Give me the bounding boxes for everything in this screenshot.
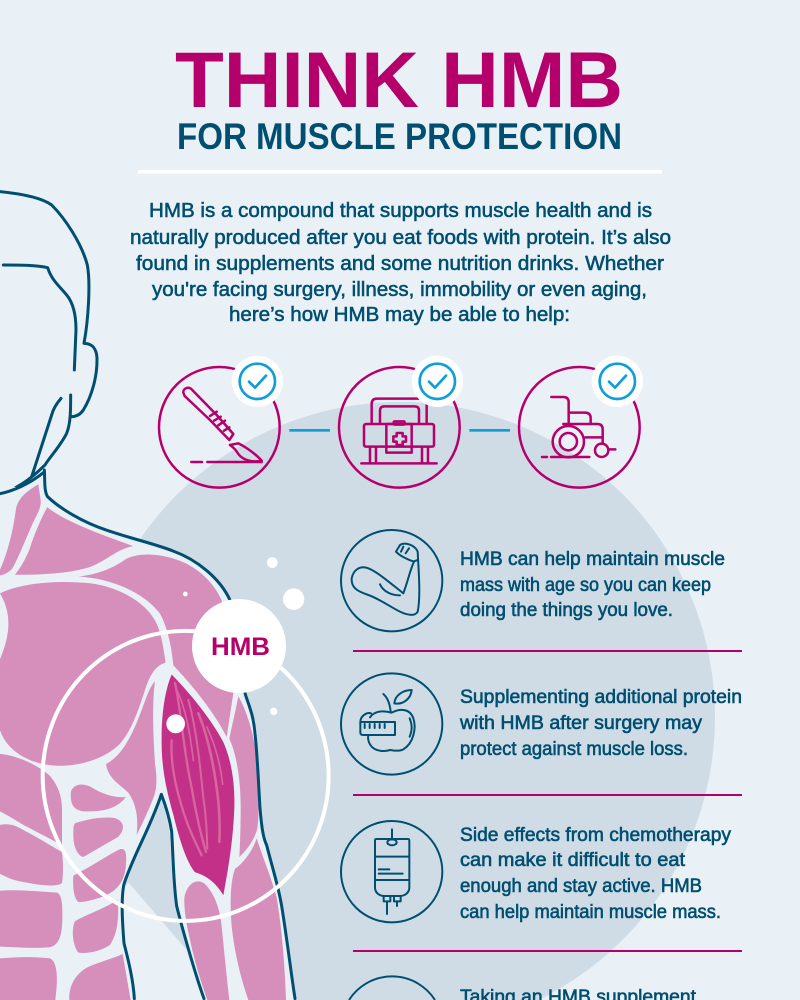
magnified ring (43, 631, 329, 921)
benefit 3 icon: IV bag (341, 821, 442, 922)
intro paragraph: HMB is a compound that supports muscle health and is (149, 200, 652, 222)
intro paragraph: naturally produced after you eat foods with protein. It’s also (130, 227, 671, 249)
benefit 1 text (460, 548, 725, 621)
divider (353, 950, 742, 952)
benefit 2 icon: apple with measuring tape (341, 673, 442, 775)
benefit 1 icon: flexed arm (341, 530, 442, 631)
title: THINK HMB (175, 35, 623, 124)
molecule dots (166, 557, 304, 733)
intro paragraph: found in supplements and some nutrition drinks. Whether (136, 253, 664, 275)
condition icons row (159, 356, 643, 488)
benefit 2 text: with HMB after surgery may (459, 712, 702, 734)
benefit 1 text: doing the things you love. (460, 599, 673, 621)
benefit 4 icon ring (349, 976, 435, 1000)
benefit 3 text: Side effects from chemotherapy (460, 824, 731, 846)
divider (353, 650, 742, 652)
benefit 3 text (460, 824, 731, 923)
connector (289, 429, 330, 432)
benefit 1 text: HMB can help maintain muscle (460, 548, 725, 570)
title divider (138, 170, 662, 174)
HMB badge: HMB (211, 633, 270, 661)
benefit 2 text (459, 686, 742, 760)
torso and arm silhouette (0, 484, 295, 1000)
gap between torso and arm (124, 794, 187, 950)
benefit 2 text: protect against muscle loss. (460, 738, 688, 760)
title: FOR MUSCLE PROTECTION (177, 116, 622, 157)
benefit 1 text: mass with age so you can keep (460, 574, 711, 596)
icon: first aid kit (339, 356, 463, 488)
pink muscles (0, 484, 286, 1000)
body outlines (0, 470, 295, 999)
HMB badge (192, 599, 286, 693)
muscular body illustration (0, 470, 329, 1000)
divider (353, 794, 742, 796)
intro paragraph: here’s how HMB may be able to help: (229, 304, 570, 326)
icon: wheelchair (519, 356, 643, 488)
benefit 2 text: Supplementing additional protein (460, 686, 742, 708)
benefit 3 text: enough and stay active. HMB (460, 875, 702, 897)
intro paragraph (130, 200, 671, 326)
intro paragraph: you're facing surgery, illness, immobility or even aging, (152, 279, 647, 301)
background circle (85, 402, 715, 1000)
head outline (0, 192, 97, 493)
benefit 3 text: can help maintain muscle mass. (460, 901, 721, 923)
connector (469, 429, 510, 432)
highlighted biceps muscle (162, 674, 234, 895)
icon: scalpel (159, 356, 283, 488)
benefit 3 text: can make it difficult to eat (460, 849, 686, 871)
